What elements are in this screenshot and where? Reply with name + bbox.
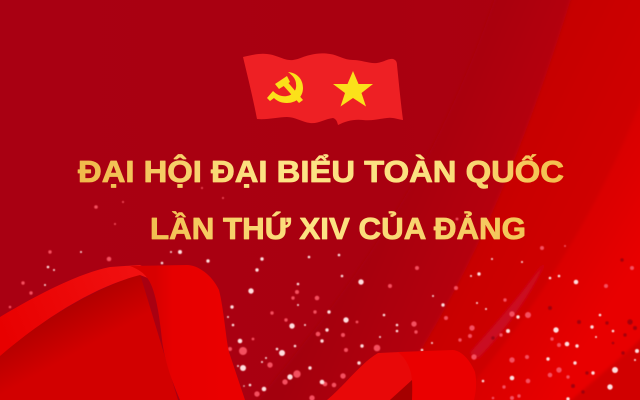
flag <box>243 53 403 125</box>
title <box>78 153 564 246</box>
confetti particles <box>9 187 639 400</box>
title line 2: LẦN THỨ XIV CỦA ĐẢNG <box>150 210 526 246</box>
hammer and sickle <box>267 72 303 103</box>
ribbon fold <box>130 265 245 400</box>
left ribbon <box>0 265 245 400</box>
ribbon left band <box>0 265 153 356</box>
background light bands <box>250 0 640 400</box>
ribbon front band <box>398 350 476 400</box>
right ribbon <box>327 350 476 400</box>
ribbon fold shadow <box>390 380 412 400</box>
flag star <box>333 71 373 106</box>
ribbon rear band <box>327 352 413 400</box>
title line 1: ĐẠI HỘI ĐẠI BIỂU TOÀN QUỐC <box>78 153 564 189</box>
ribbon underside <box>0 274 178 400</box>
flag field <box>243 53 403 125</box>
